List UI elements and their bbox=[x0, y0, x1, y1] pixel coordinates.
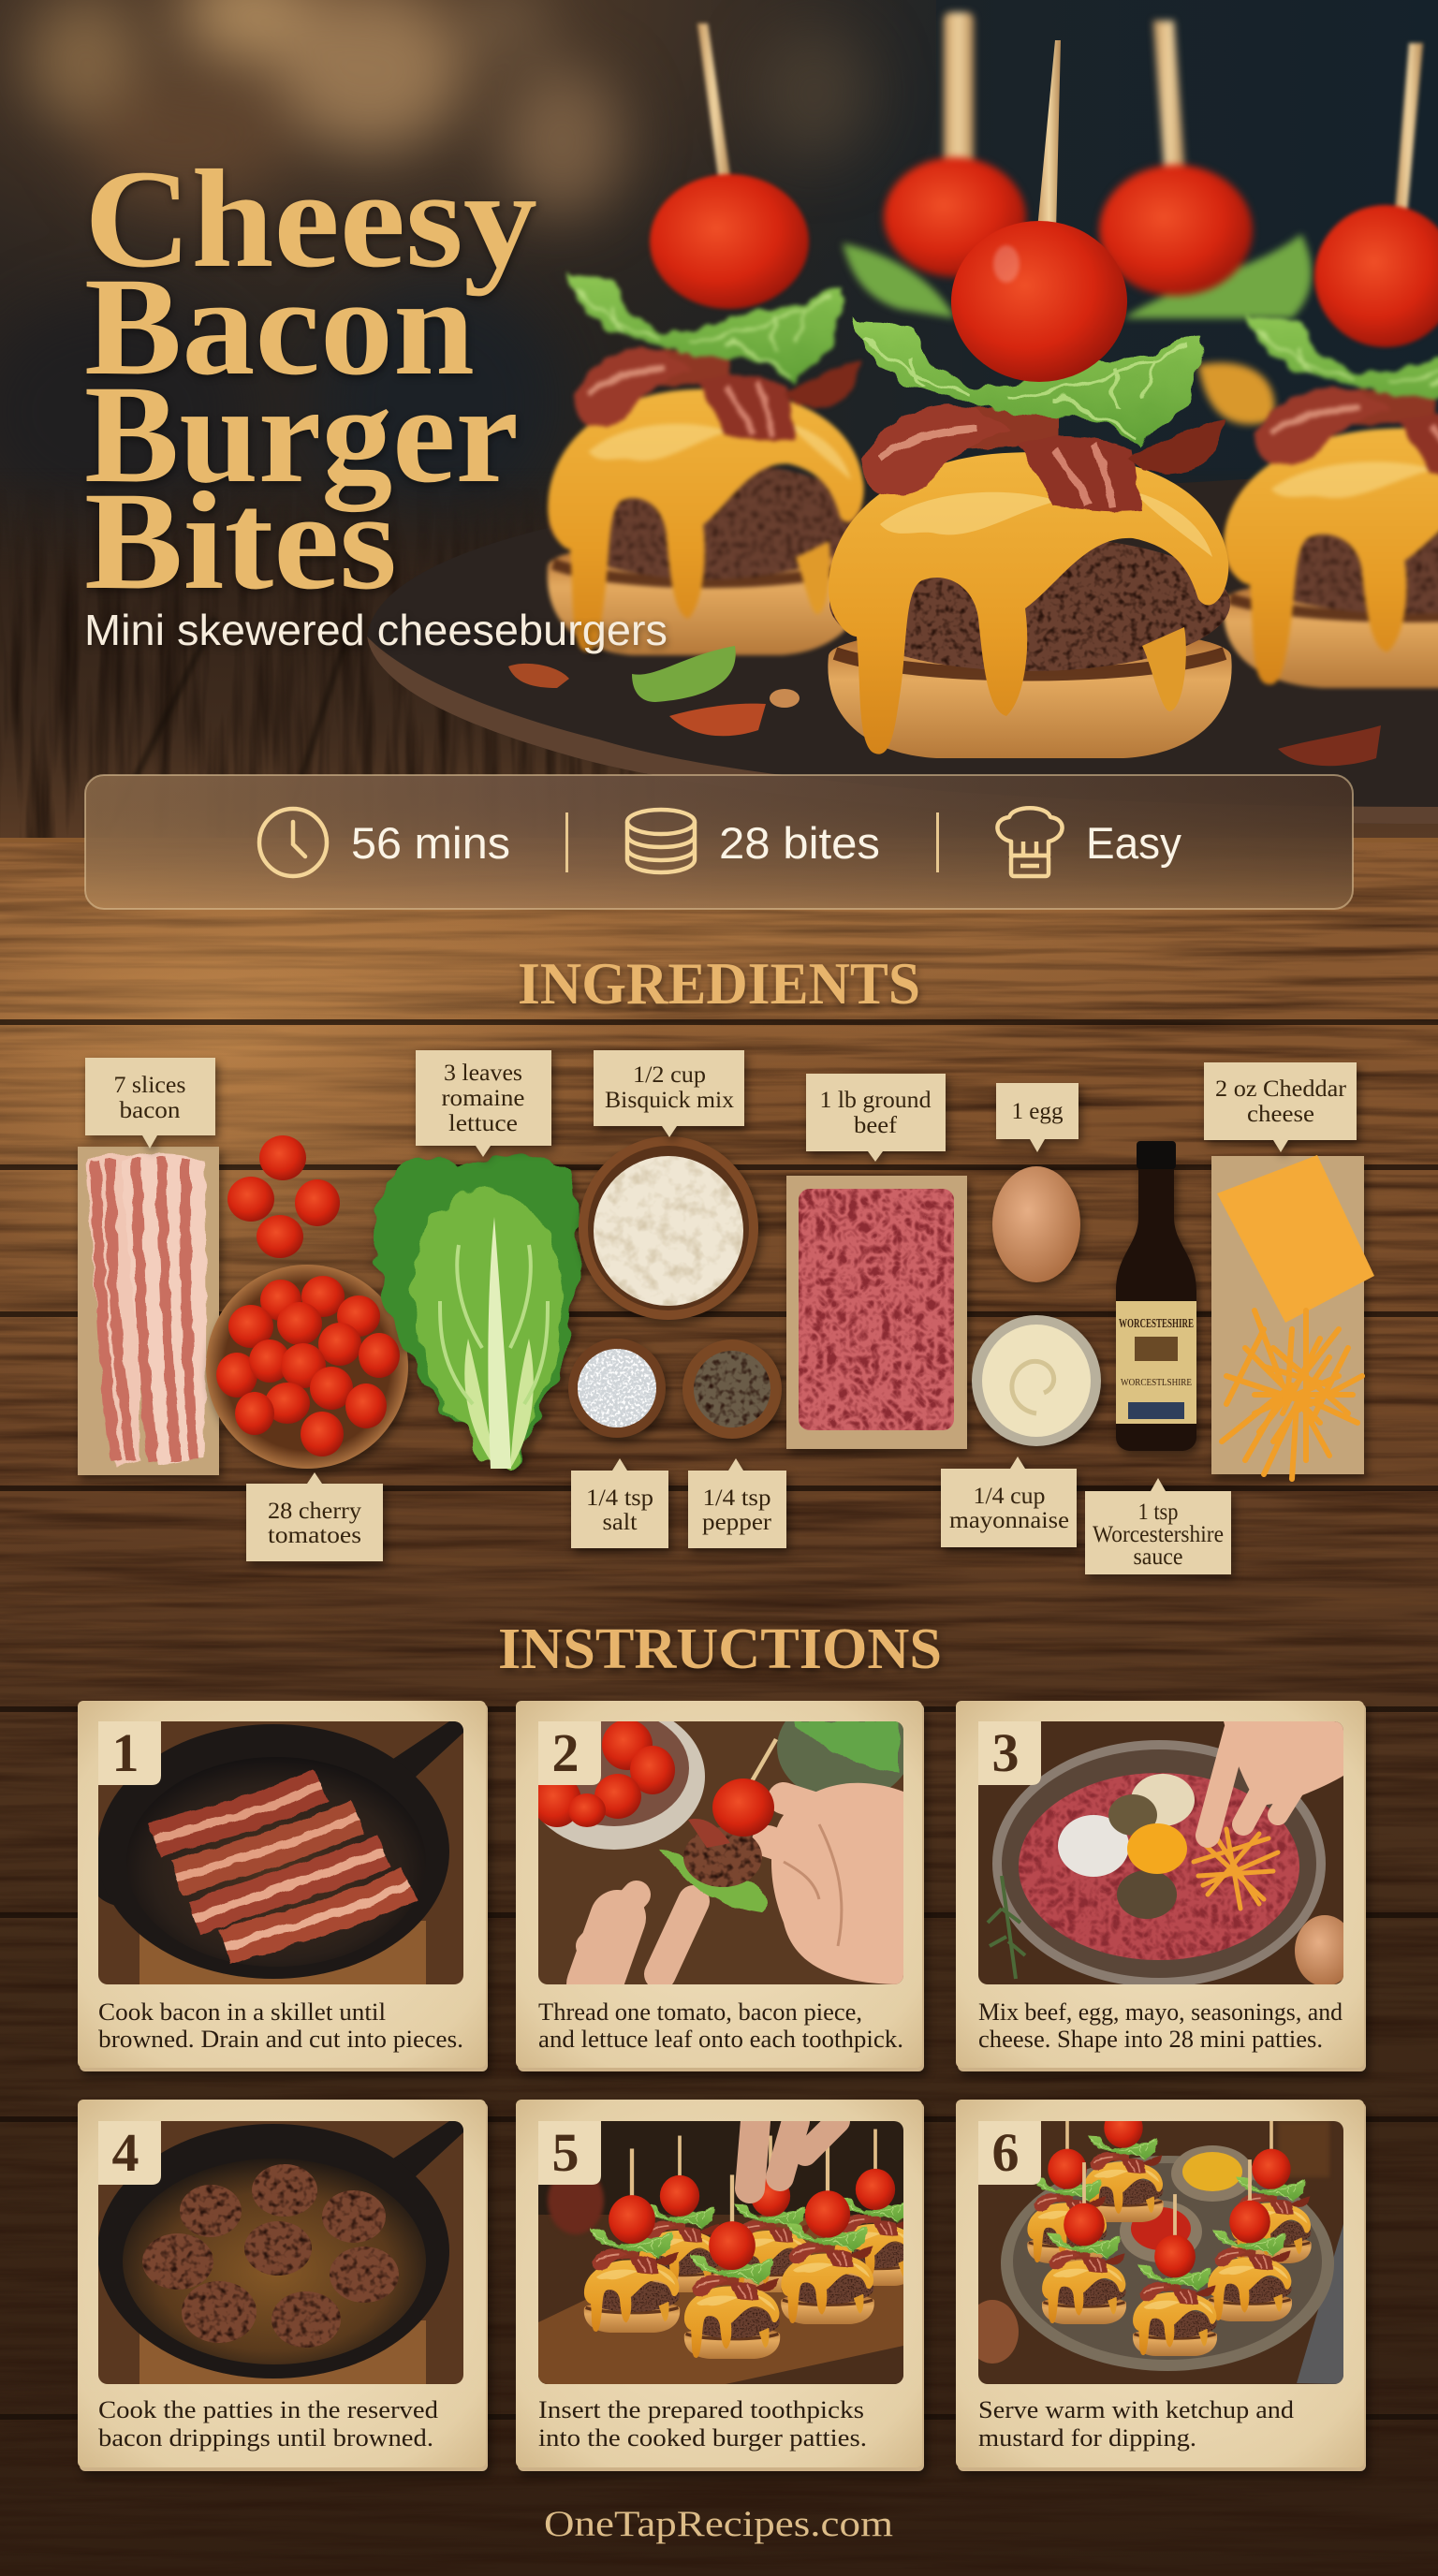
ingredient label: egg: 1 egg bbox=[1011, 1099, 1064, 1124]
icon: chef hat bbox=[997, 808, 1063, 876]
ingredient: Worcestershire sauce bottle bbox=[1116, 1141, 1196, 1451]
step card 1 bbox=[78, 1701, 488, 2071]
step 4 text: Cook the patties in the reserved bbox=[98, 2396, 438, 2423]
ingredient label: ground beef: beef bbox=[854, 1113, 898, 1138]
step 6 text bbox=[978, 2396, 1294, 2452]
ingredient label: Worcestershire sauce: Worcestershire bbox=[1093, 1522, 1224, 1547]
step card 4 bbox=[78, 2100, 488, 2471]
step 6 text: Serve warm with ketchup and bbox=[978, 2396, 1294, 2423]
step 4 text: bacon drippings until browned. bbox=[98, 2424, 433, 2452]
ingredient: egg bbox=[992, 1166, 1080, 1282]
title: Bites bbox=[84, 463, 397, 619]
step 1 number bbox=[98, 1721, 161, 1785]
step 3 photo: mixing the beef bbox=[978, 1721, 1355, 1987]
ingredient label: Worcestershire sauce bbox=[1085, 1478, 1231, 1574]
step 5 text: into the cooked burger patties. bbox=[538, 2424, 867, 2452]
ingredient label: egg bbox=[996, 1083, 1078, 1152]
left hand bbox=[590, 1895, 694, 1984]
ingredients panel bbox=[78, 1135, 1374, 1479]
ingredient label: romaine lettuce: lettuce bbox=[448, 1111, 518, 1136]
step 2 photo: threading a toothpick bbox=[523, 1693, 912, 1984]
ingredient label: Bisquick mix: 1/2 cup bbox=[633, 1062, 706, 1088]
ingredient label: Worcestershire sauce: 1 tsp bbox=[1138, 1500, 1178, 1525]
right burger bbox=[1224, 43, 1438, 688]
ingredient label: cherry tomatoes bbox=[246, 1472, 383, 1561]
step 1 text: Cook bacon in a skillet until bbox=[98, 1998, 386, 2026]
ingredient label: salt: 1/4 tsp bbox=[586, 1486, 653, 1511]
ingredient label: mayonnaise: 1/4 cup bbox=[974, 1484, 1045, 1509]
step 6 number: 6 bbox=[992, 2122, 1019, 2183]
ingredient label: romaine lettuce bbox=[416, 1050, 551, 1157]
ingredient: salt bowl bbox=[568, 1339, 666, 1438]
step card 2 bbox=[516, 1693, 924, 2071]
ingredient label: salt bbox=[571, 1458, 668, 1548]
ingredient label: romaine lettuce: 3 leaves bbox=[444, 1061, 522, 1086]
step 5 text: Insert the prepared toothpicks bbox=[538, 2396, 864, 2423]
ingredient label: cheddar: 2 oz Cheddar bbox=[1215, 1076, 1347, 1102]
plate bbox=[367, 468, 1438, 824]
ingredient label: romaine lettuce: romaine bbox=[442, 1086, 524, 1111]
step 4 text bbox=[98, 2396, 438, 2452]
crumbs on plate bbox=[508, 646, 1381, 766]
step 5 number bbox=[538, 2121, 601, 2185]
ingredient: Worcestershire sauce bottle: WORCESTESHIRE bbox=[1119, 1317, 1194, 1331]
step 2 text bbox=[538, 1998, 903, 2053]
step 2 text: Thread one tomato, bacon piece, bbox=[538, 1998, 862, 2026]
stat: difficulty: Easy bbox=[1086, 818, 1181, 868]
ingredient: bacon on paper bbox=[78, 1147, 219, 1475]
step card 5 bbox=[516, 2100, 924, 2471]
step 6 photo: plated bites with dips bbox=[966, 2069, 1343, 2384]
ingredient label: pepper bbox=[688, 1458, 786, 1548]
step 1 text: browned. Drain and cut into pieces. bbox=[98, 2026, 463, 2053]
step 5 number: 5 bbox=[552, 2122, 579, 2183]
ingredient label: mayonnaise: mayonnaise bbox=[949, 1508, 1069, 1533]
step 4 number bbox=[98, 2121, 161, 2185]
stats bar bbox=[85, 775, 1353, 909]
ingredient label: cherry tomatoes: 28 cherry bbox=[268, 1499, 362, 1524]
title: Cheesy bbox=[84, 141, 537, 297]
step 1 number: 1 bbox=[112, 1722, 139, 1783]
ingredient label: bacon: 7 slices bbox=[114, 1073, 185, 1098]
step 3 number: 3 bbox=[992, 1722, 1019, 1783]
title bbox=[84, 141, 537, 619]
ingredient label: pepper: 1/4 tsp bbox=[702, 1486, 771, 1511]
step 2 text: and lettuce leaf onto each toothpick. bbox=[538, 2026, 903, 2053]
stat: servings: 28 bites bbox=[719, 818, 880, 868]
ingredient label: pepper: pepper bbox=[702, 1510, 772, 1535]
step card 3 bbox=[956, 1701, 1366, 2071]
ingredient label: Bisquick mix: Bisquick mix bbox=[605, 1088, 735, 1113]
step 2 number: 2 bbox=[552, 1722, 579, 1783]
ingredient: cheddar on paper bbox=[1211, 1155, 1374, 1479]
icon: clock bbox=[259, 809, 327, 876]
ingredient label: bacon bbox=[85, 1058, 215, 1149]
step 6 text: mustard for dipping. bbox=[978, 2424, 1196, 2452]
back burger left bbox=[548, 23, 866, 655]
ingredient label: salt: salt bbox=[603, 1510, 638, 1535]
ingredient label: cherry tomatoes: tomatoes bbox=[268, 1523, 361, 1548]
step 3 text bbox=[978, 1998, 1343, 2053]
ingredient: Bisquick mix bowl bbox=[579, 1136, 758, 1320]
ingredient label: ground beef: 1 lb ground bbox=[820, 1088, 932, 1113]
ingredient: loose cherry tomatoes bbox=[227, 1135, 340, 1258]
heading: instructions: INSTRUCTIONS bbox=[498, 1617, 942, 1681]
stat: time: 56 mins bbox=[351, 818, 510, 868]
bokeh background lights bbox=[0, 0, 871, 524]
ingredient: romaine lettuce bbox=[374, 1156, 579, 1469]
ingredient: mayonnaise bbox=[972, 1315, 1101, 1446]
title: Burger bbox=[84, 357, 519, 512]
step 3 text: Mix beef, egg, mayo, seasonings, and bbox=[978, 1998, 1343, 2026]
ingredient label: cheddar: cheese bbox=[1247, 1102, 1314, 1127]
step 3 text: cheese. Shape into 28 mini patties. bbox=[978, 2026, 1323, 2053]
step card 6 bbox=[956, 2069, 1366, 2471]
subtitle: Mini skewered cheeseburgers bbox=[84, 606, 668, 654]
step 4 number: 4 bbox=[112, 2122, 139, 2183]
ingredient: ground beef on paper bbox=[786, 1176, 967, 1449]
heading: ingredients: INGREDIENTS bbox=[518, 951, 920, 1017]
right hand bbox=[771, 1783, 903, 1984]
icon: stack of bites bbox=[627, 810, 695, 872]
wooden table bbox=[0, 526, 1438, 838]
footer: website: OneTapRecipes.com bbox=[544, 2504, 893, 2544]
ingredient: pepper bowl bbox=[682, 1339, 782, 1439]
ingredient label: mayonnaise bbox=[941, 1456, 1077, 1547]
main burger bbox=[828, 40, 1232, 758]
ingredient label: ground beef bbox=[806, 1074, 946, 1162]
step 3 number bbox=[978, 1721, 1041, 1785]
step 6 number bbox=[978, 2121, 1041, 2185]
ingredient label: Worcestershire sauce: sauce bbox=[1133, 1544, 1183, 1570]
step 2 number bbox=[538, 1721, 601, 1785]
step 5 photo: inserting toothpicks bbox=[538, 2121, 917, 2384]
step 1 photo: bacon in skillet bbox=[95, 1721, 463, 1984]
ingredient label: Bisquick mix bbox=[594, 1050, 744, 1137]
title: Bacon bbox=[84, 249, 475, 404]
ingredient: bowl of cherry tomatoes bbox=[206, 1265, 408, 1469]
back burgers: far tomatoes bbox=[843, 12, 1312, 424]
ingredient label: cheddar bbox=[1204, 1062, 1357, 1152]
step 1 text bbox=[98, 1998, 463, 2053]
ingredient: Worcestershire sauce bottle: WORCESTLSHIRE bbox=[1121, 1377, 1192, 1388]
step 5 text bbox=[538, 2396, 867, 2452]
hero photo: burgers on a plate bbox=[0, 0, 1438, 847]
step 4 photo: patties in skillet bbox=[97, 2121, 463, 2384]
ingredient label: bacon: bacon bbox=[120, 1098, 181, 1123]
